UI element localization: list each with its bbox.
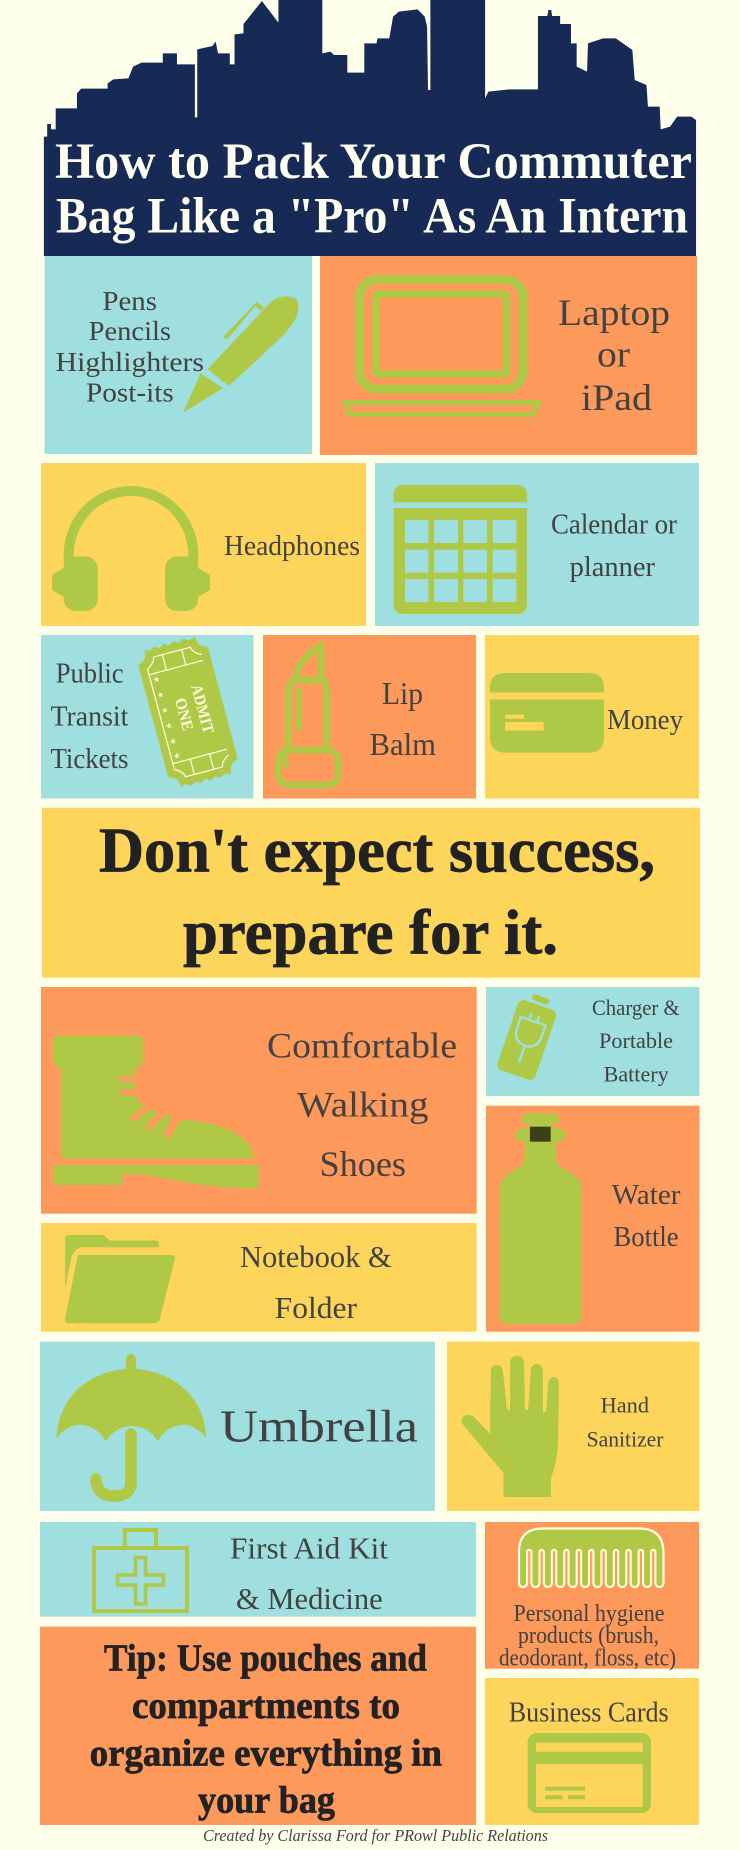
icon: business card — [528, 1733, 651, 1813]
label: laptop or ipad: iPad — [581, 378, 653, 419]
panel: business cards — [485, 1678, 699, 1825]
label: pens list: Highlighters — [56, 347, 204, 377]
quote text — [99, 816, 655, 968]
label: charger and portable battery: Charger & — [592, 995, 680, 1020]
icon: first aid kit — [94, 1530, 187, 1611]
panel: first aid kit — [40, 1522, 476, 1617]
label: pens list: Pens — [102, 286, 157, 316]
label: personal hygiene products: products (brush, — [518, 1623, 659, 1649]
label: notebook and folder: Folder — [275, 1290, 358, 1325]
panel: lip balm — [263, 635, 476, 798]
icon: ticket — [135, 633, 241, 791]
icon: boot — [53, 1036, 259, 1188]
label: water bottle — [612, 1180, 681, 1253]
panel: quote — [42, 808, 700, 978]
label: hand sanitizer — [587, 1393, 664, 1452]
skyline — [44, 0, 696, 256]
icon: comb — [519, 1528, 664, 1587]
tip text: compartments to — [132, 1685, 400, 1727]
label: comfortable walking shoes: Walking — [297, 1085, 428, 1125]
panel: money — [485, 635, 699, 798]
icon: laptop — [346, 280, 538, 414]
panel: headphones — [41, 463, 366, 626]
icon: ticket: ★ — [168, 736, 178, 747]
quote text: Don't expect success, — [99, 816, 655, 886]
icon: ticket: ★ — [152, 674, 161, 685]
icon: calendar — [394, 485, 527, 614]
label: charger and portable battery — [592, 995, 680, 1087]
label: first aid kit and medicine: First Aid Kit — [230, 1531, 388, 1566]
label: public transit tickets — [50, 659, 129, 775]
label: personal hygiene products — [499, 1601, 676, 1672]
icon: ticket: ★ — [160, 705, 169, 716]
panel: hand sanitizer — [447, 1342, 700, 1511]
footer credit: Created by Clarissa Ford for PRowl Public Relations — [203, 1826, 548, 1845]
panel: pens — [44, 256, 312, 454]
label: comfortable walking shoes: Shoes — [320, 1144, 406, 1184]
panel: walking shoes — [41, 987, 477, 1214]
panel: calendar — [375, 463, 699, 626]
icon: hand — [461, 1356, 559, 1497]
label: pens list — [56, 286, 204, 408]
label: hand sanitizer: Hand — [601, 1393, 649, 1418]
label: money: Money — [607, 705, 683, 736]
label: water bottle: Water — [612, 1180, 681, 1211]
label: comfortable walking shoes: Comfortable — [267, 1026, 457, 1066]
tip text: organize everything in — [90, 1733, 442, 1775]
label: public transit tickets: Transit — [50, 702, 129, 732]
label: public transit tickets: Tickets — [50, 744, 128, 775]
label: calendar or planner: planner — [570, 552, 656, 583]
label: charger and portable battery: Portable — [599, 1028, 673, 1053]
icon: folder — [65, 1235, 175, 1323]
label: notebook and folder: Notebook & — [240, 1239, 392, 1274]
panel: notebook and folder — [41, 1223, 477, 1332]
label: personal hygiene products: Personal hygiene — [514, 1601, 664, 1627]
label: hand sanitizer: Sanitizer — [587, 1427, 664, 1452]
icon: battery — [496, 990, 561, 1081]
label: first aid kit and medicine — [230, 1531, 388, 1616]
panel: charger — [486, 987, 700, 1096]
icon: pen — [183, 296, 298, 413]
icon: ticket: ★ — [156, 690, 165, 700]
header: skyline and title — [44, 0, 696, 256]
label: calendar or planner: Calendar or — [551, 510, 678, 540]
icon: ticket: ONE — [171, 696, 196, 733]
label: headphones: Headphones — [224, 531, 360, 562]
tip text — [90, 1638, 442, 1822]
tip text: Tip: Use pouches and — [104, 1638, 427, 1680]
label: water bottle: Bottle — [614, 1222, 679, 1253]
label: lip balm: Lip — [382, 675, 423, 711]
panel: water bottle — [486, 1106, 700, 1332]
title: Bag Like a "Pro" As An Intern — [56, 188, 688, 244]
panel: laptop — [320, 256, 697, 455]
label: first aid kit and medicine: & Medicine — [236, 1581, 383, 1616]
label: laptop or ipad — [558, 293, 670, 419]
label: umbrella: Umbrella — [220, 1401, 418, 1452]
quote text: prepare for it. — [183, 898, 558, 968]
icon: ticket: ADMIT — [187, 683, 217, 736]
label: laptop or ipad: Laptop — [558, 293, 670, 334]
label: personal hygiene products: deodorant, floss, etc) — [499, 1646, 676, 1672]
title: How to Pack Your Commuter — [55, 134, 692, 190]
icon: ticket: ★ — [172, 751, 182, 761]
label: pens list: Post-its — [86, 378, 174, 408]
label: notebook and folder — [240, 1239, 392, 1325]
label: business cards: Business Cards — [509, 1698, 669, 1729]
panel: personal hygiene — [485, 1522, 699, 1672]
label: calendar or planner — [551, 510, 678, 583]
label: laptop or ipad: or — [597, 335, 630, 376]
icon: credit card — [490, 673, 604, 753]
label: lip balm: Balm — [370, 726, 436, 762]
label: public transit tickets: Public — [56, 659, 124, 690]
label: pens list: Pencils — [89, 316, 171, 346]
icon: umbrella — [57, 1354, 206, 1496]
title — [55, 134, 692, 244]
label: charger and portable battery: Battery — [604, 1062, 669, 1087]
label: comfortable walking shoes — [267, 1026, 457, 1184]
tip text: your bag — [198, 1780, 335, 1822]
panel: tip — [40, 1627, 476, 1825]
panel: public transit tickets — [41, 633, 254, 798]
icon: headphones — [52, 491, 210, 611]
panel: umbrella — [40, 1342, 435, 1511]
icon: lipstick — [278, 646, 338, 785]
icon: bottle — [499, 1113, 581, 1324]
icon: ticket: ★ — [164, 721, 174, 731]
label: lip balm — [370, 675, 436, 762]
